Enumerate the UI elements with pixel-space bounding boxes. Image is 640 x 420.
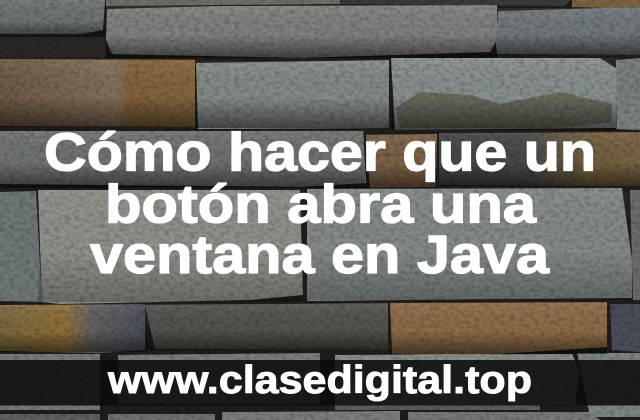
sixth row stones [0,353,640,417]
url banner background [0,360,640,406]
bottom row stones [0,411,600,420]
olive patch on stone [395,92,612,128]
title [44,122,596,285]
third row stones [0,131,640,188]
title line 1: Cómo hacer que un [44,122,596,182]
title line 3: ventana en Java [90,225,550,285]
website url: www.clasedigital.top [107,359,532,402]
second row stones [0,58,640,130]
large fourth row stones [0,188,640,304]
top row stones [0,0,640,58]
fifth row stones [0,302,640,355]
title line 2: botón abra una [105,174,537,234]
